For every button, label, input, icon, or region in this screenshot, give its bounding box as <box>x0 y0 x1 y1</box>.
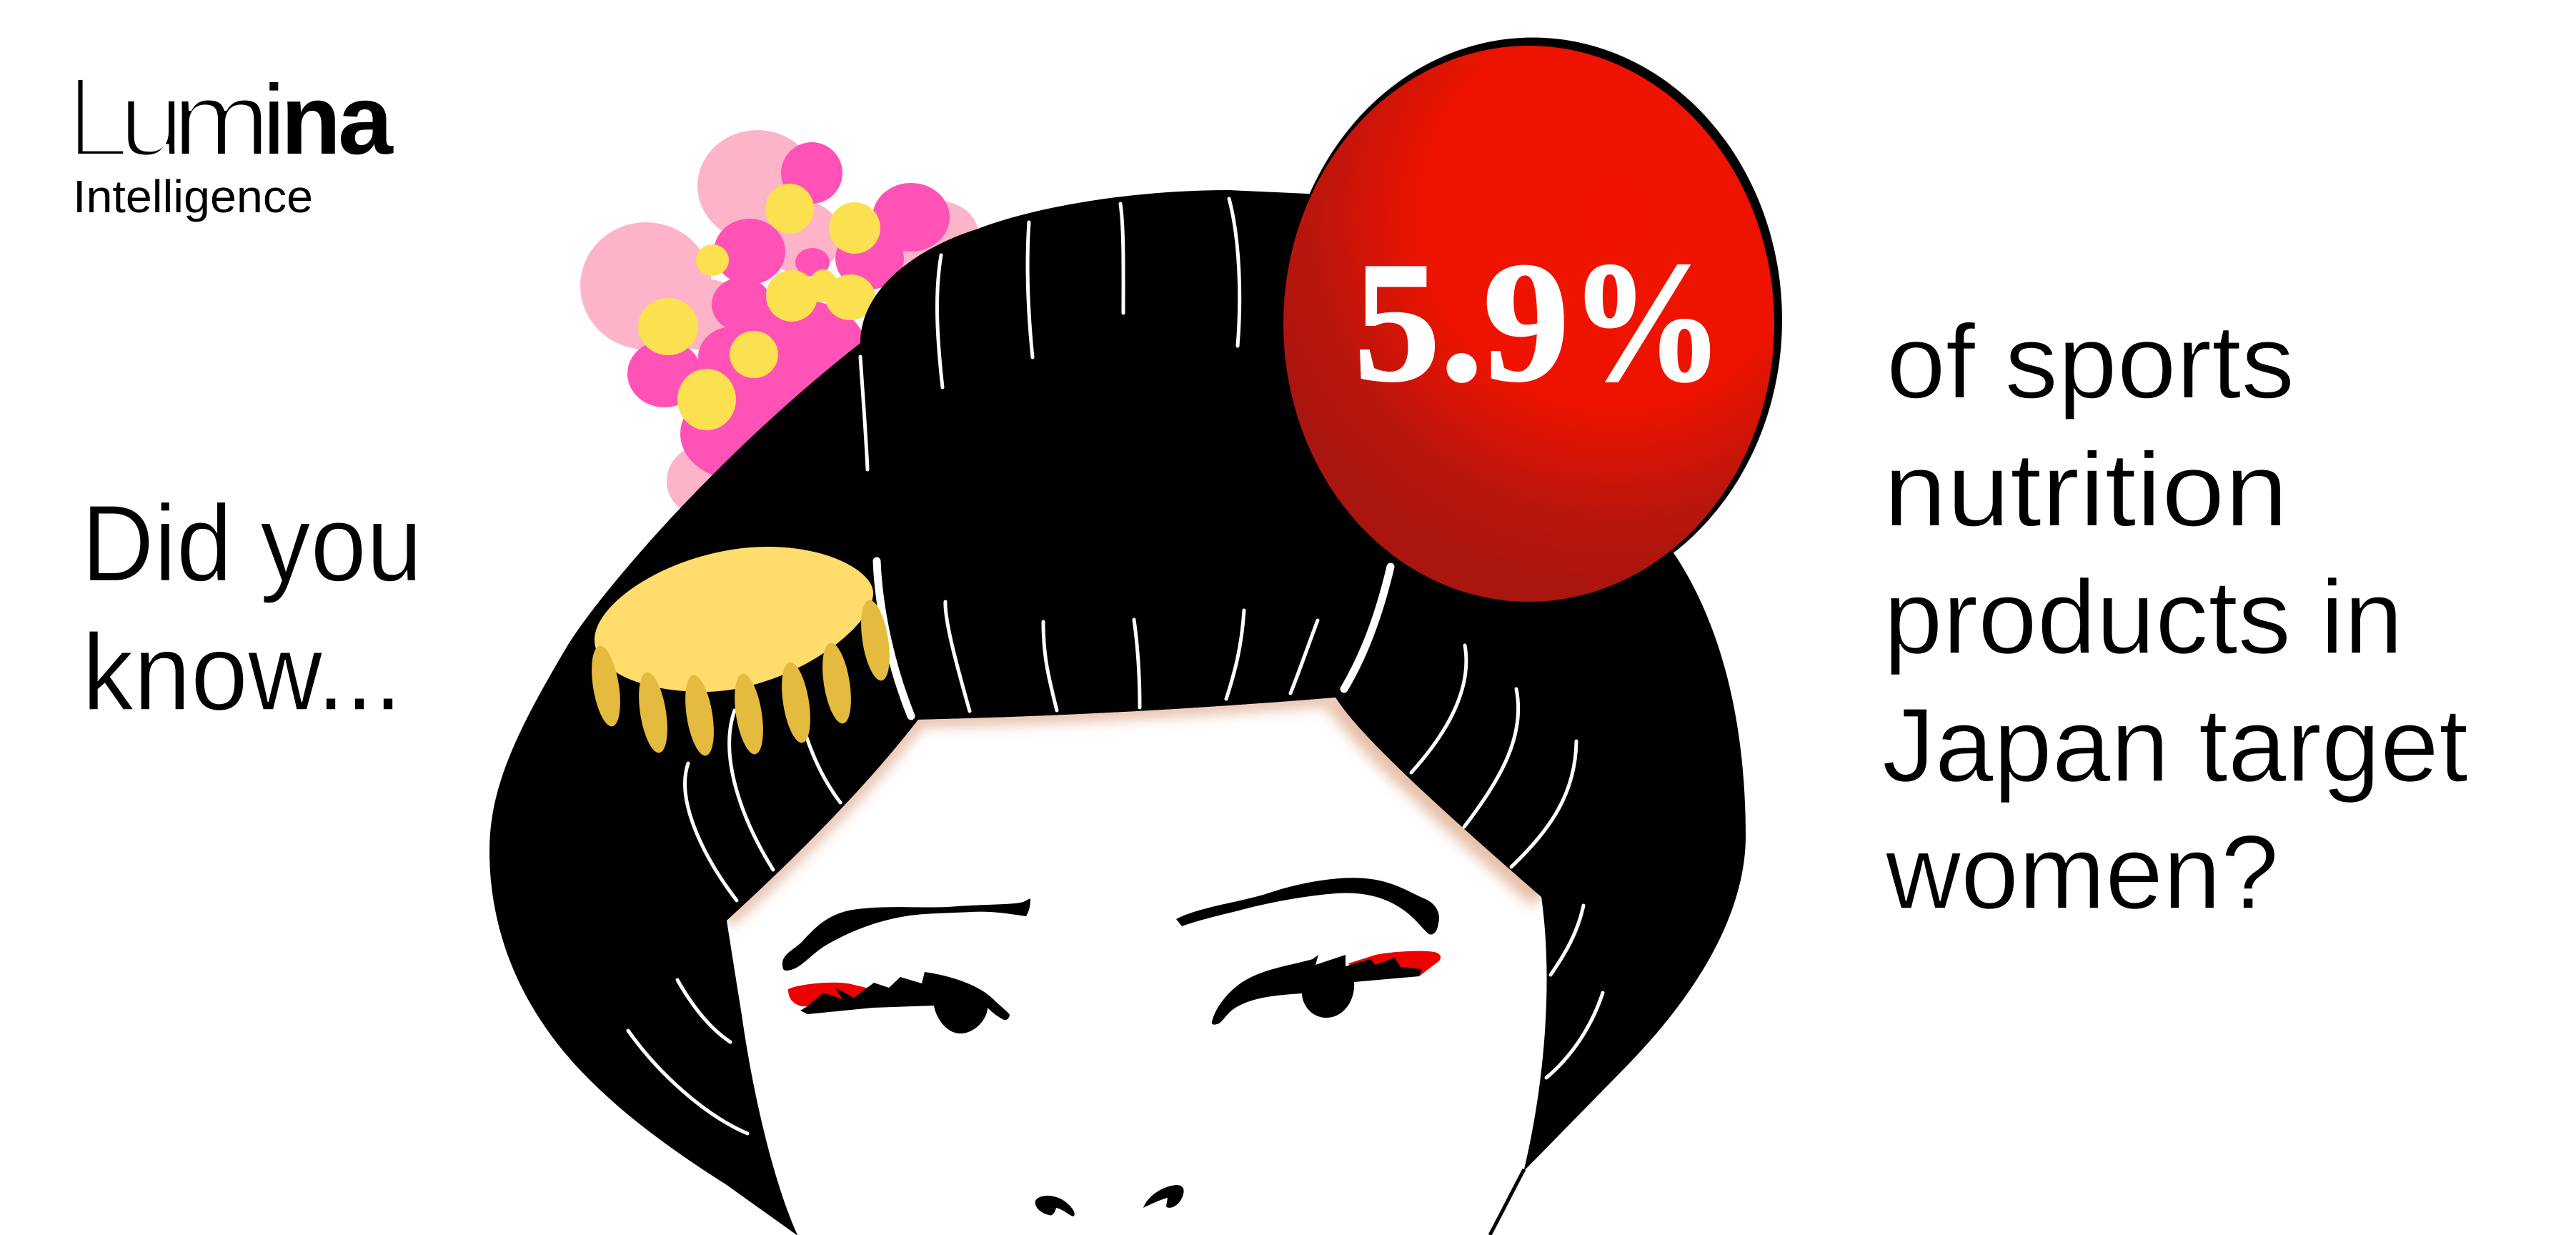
statement line 3: products in <box>1884 559 2403 676</box>
heading line 1: Did you <box>81 483 422 605</box>
ball fill <box>1283 46 1774 602</box>
light pink blossoms <box>580 130 978 517</box>
right side strands <box>1411 645 1603 1078</box>
comb teeth <box>587 598 895 758</box>
comb body <box>595 547 873 692</box>
logo wordmark: m <box>172 61 270 178</box>
left eyebrow <box>782 898 1030 971</box>
logo wordmark: n <box>281 65 341 175</box>
right eyelid red <box>1348 951 1441 976</box>
statistic value: % <box>1570 227 1724 417</box>
black hair silhouette <box>489 190 1746 1235</box>
statement line 1: of sports <box>1886 304 2294 421</box>
hot pink blossoms <box>627 142 950 480</box>
ball outline <box>1283 37 1782 602</box>
logo wordmark <box>66 51 394 182</box>
left nostril <box>1035 1196 1075 1216</box>
illustration: geisha hair and face <box>489 190 1746 1235</box>
statistic value <box>1354 227 1724 417</box>
skin shadow along the hairline <box>727 698 1541 921</box>
statement line 4: Japan target <box>1882 687 2468 804</box>
right eye and lashes <box>1212 955 1422 1025</box>
left eye and lashes <box>800 972 1010 1033</box>
logo wordmark: u <box>118 59 185 179</box>
right nostril <box>1143 1185 1184 1208</box>
logo wordmark: i <box>263 65 285 175</box>
logo wordmark: L <box>66 51 130 182</box>
thick front strands <box>877 561 1391 716</box>
logo: Lumina Intelligence <box>66 51 394 222</box>
face edge line <box>1490 1169 1524 1235</box>
left side strands <box>628 710 840 1134</box>
icon: golden comb <box>587 547 895 758</box>
illustration: flower hair ornament <box>580 130 978 517</box>
heading: Did you know <box>81 483 422 733</box>
statement text <box>1882 304 2468 931</box>
white face <box>727 698 1547 1235</box>
left eyelid red <box>788 983 878 1008</box>
hair highlight strands <box>628 199 1603 1134</box>
logo subtitle: Intelligence <box>73 171 313 222</box>
illustration: facial features <box>782 878 1441 1216</box>
statement line 5: women? <box>1885 814 2279 931</box>
right eyebrow <box>1176 878 1439 935</box>
statistic value: 5.9 <box>1354 227 1569 417</box>
red ball callout: 5.9% <box>1283 37 1782 602</box>
crown strands <box>860 199 1240 470</box>
yellow blossoms <box>638 184 880 430</box>
heading line 2: know... <box>82 612 402 733</box>
fringe strands <box>945 602 1318 711</box>
logo wordmark: a <box>338 65 394 175</box>
statement line 2: nutrition <box>1884 432 2288 549</box>
